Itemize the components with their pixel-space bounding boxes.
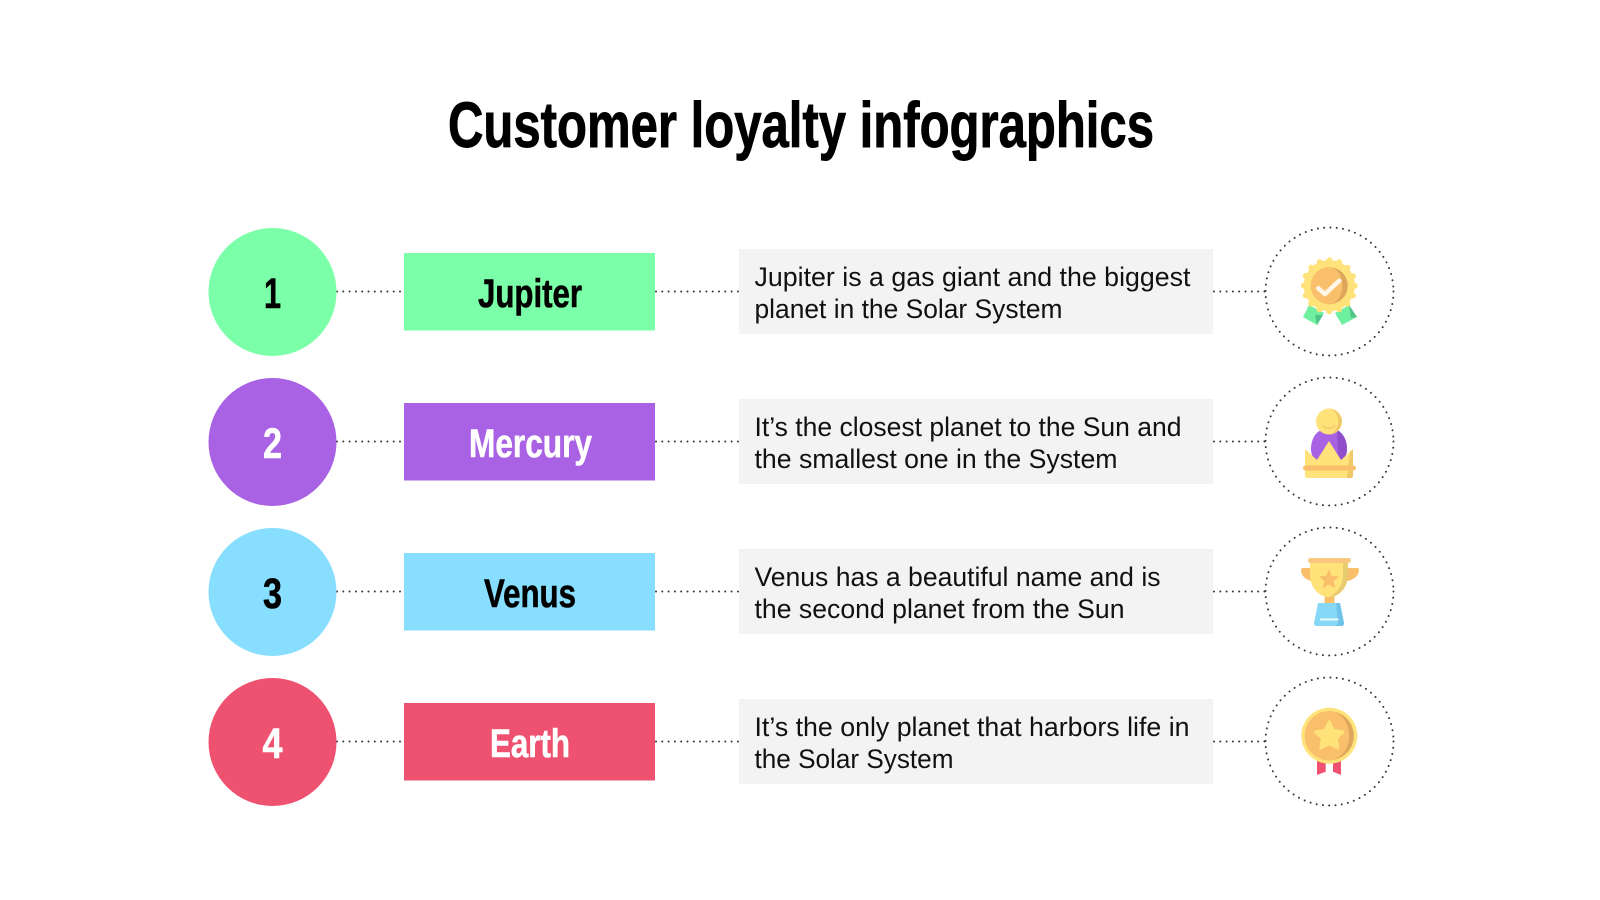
description: Earth <box>739 699 1213 784</box>
label: Earth: Earth <box>490 722 570 766</box>
number circle 4: 4 <box>262 720 283 768</box>
icon: trophy <box>1266 528 1394 656</box>
icon: rosette badge with check <box>1266 228 1394 356</box>
description: Jupiter: Jupiter is a gas giant and the biggest <box>754 262 1191 292</box>
description: Jupiter <box>739 249 1213 334</box>
description: Venus <box>739 549 1213 634</box>
number circle 3 <box>208 528 336 656</box>
number circle 1: 1 <box>264 270 281 318</box>
number circle 2: 2 <box>263 420 282 468</box>
description: Mercury: the smallest one in the System <box>754 444 1118 474</box>
row 1: Jupiter <box>208 228 1394 356</box>
description: Venus: Venus has a beautiful name and is <box>754 562 1160 592</box>
icon: crown with figure <box>1266 378 1394 506</box>
description: Earth: the Solar System <box>754 744 954 774</box>
description: Venus: the second planet from the Sun <box>754 594 1124 624</box>
number circle 2 <box>208 378 336 506</box>
row 4: Earth <box>208 678 1394 806</box>
title: Customer loyalty infographics <box>448 89 1154 161</box>
label: Mercury: Mercury <box>469 422 593 466</box>
description: Mercury: It’s the closest planet to the Sun and <box>754 412 1182 442</box>
description: Mercury <box>739 399 1213 484</box>
label: Mercury <box>404 403 655 480</box>
number circle 3: 3 <box>263 570 282 618</box>
label: Jupiter <box>404 253 655 330</box>
number circle 4 <box>208 678 336 806</box>
icon: star medal <box>1266 678 1394 806</box>
number circle 1 <box>208 228 336 356</box>
row 2: Mercury <box>208 378 1394 506</box>
label: Earth <box>404 703 655 780</box>
label: Venus: Venus <box>484 572 576 616</box>
description: Earth: It’s the only planet that harbors life in <box>754 712 1190 742</box>
row 3: Venus <box>208 528 1394 656</box>
label: Venus <box>404 553 655 630</box>
label: Jupiter: Jupiter <box>478 272 582 316</box>
description: Jupiter: planet in the Solar System <box>754 294 1062 324</box>
